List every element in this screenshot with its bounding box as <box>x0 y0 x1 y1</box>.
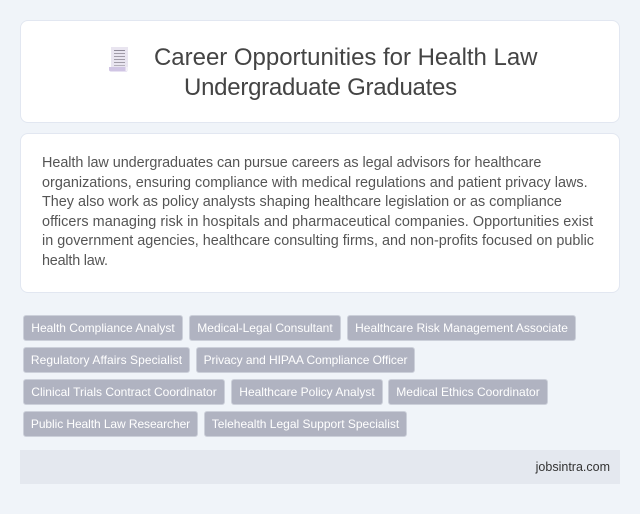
title: Career Opportunities for Health Law <box>154 44 538 71</box>
text block: description <box>42 155 594 268</box>
tag: Healthcare Risk Management Associate: Healthcare Risk Management Associate <box>355 321 568 335</box>
panel: description card <box>20 133 620 293</box>
text block: description: Health law undergraduates can pursue careers as legal advisors for healthcare <box>42 155 541 171</box>
text block: description: organizations, ensuring compliance with medical regulations and patient privacy laws. <box>42 174 588 190</box>
text block: description: officers managing risk in hospitals and pharmaceutical companies. Opportunities exist <box>42 214 593 230</box>
tag: Healthcare Policy Analyst <box>231 379 383 405</box>
tag: Health Compliance Analyst <box>23 315 183 341</box>
text block: description: health law. <box>42 252 108 268</box>
tag: Regulatory Affairs Specialist: Regulatory Affairs Specialist <box>31 353 182 367</box>
tag: Medical Ethics Coordinator <box>388 379 548 405</box>
icon: document scroll <box>109 47 128 72</box>
footer bar <box>20 450 620 484</box>
tag: Medical-Legal Consultant <box>189 315 341 341</box>
tag: Medical Ethics Coordinator: Medical Ethics Coordinator <box>396 385 540 399</box>
text block: description: They also work as policy analysts shaping healthcare legislation or as compliance <box>42 194 562 210</box>
panel: header card <box>20 20 620 123</box>
tag: Health Compliance Analyst: Health Compliance Analyst <box>31 321 175 335</box>
title <box>154 44 538 101</box>
footer text: jobsintra.com <box>536 460 610 474</box>
text block: description: in government agencies, healthcare consulting firms, and non-profits focused on public <box>42 233 594 249</box>
tag: Privacy and HIPAA Compliance Officer: Privacy and HIPAA Compliance Officer <box>204 353 407 367</box>
tag: Telehealth Legal Support Specialist <box>204 411 407 437</box>
tag: Telehealth Legal Support Specialist: Telehealth Legal Support Specialist <box>212 417 399 431</box>
tag: Healthcare Policy Analyst: Healthcare Policy Analyst <box>239 385 375 399</box>
tag: Public Health Law Researcher <box>23 411 198 437</box>
title: Undergraduate Graduates <box>184 74 457 101</box>
tag: Medical-Legal Consultant: Medical-Legal Consultant <box>197 321 333 335</box>
tag: Privacy and HIPAA Compliance Officer <box>196 347 415 373</box>
tag: Regulatory Affairs Specialist <box>23 347 190 373</box>
tag: Clinical Trials Contract Coordinator: Clinical Trials Contract Coordinator <box>31 385 217 399</box>
tag list <box>23 315 576 437</box>
tag: Healthcare Risk Management Associate <box>347 315 576 341</box>
tag: Public Health Law Researcher: Public Health Law Researcher <box>31 417 190 431</box>
tag: Clinical Trials Contract Coordinator <box>23 379 225 405</box>
